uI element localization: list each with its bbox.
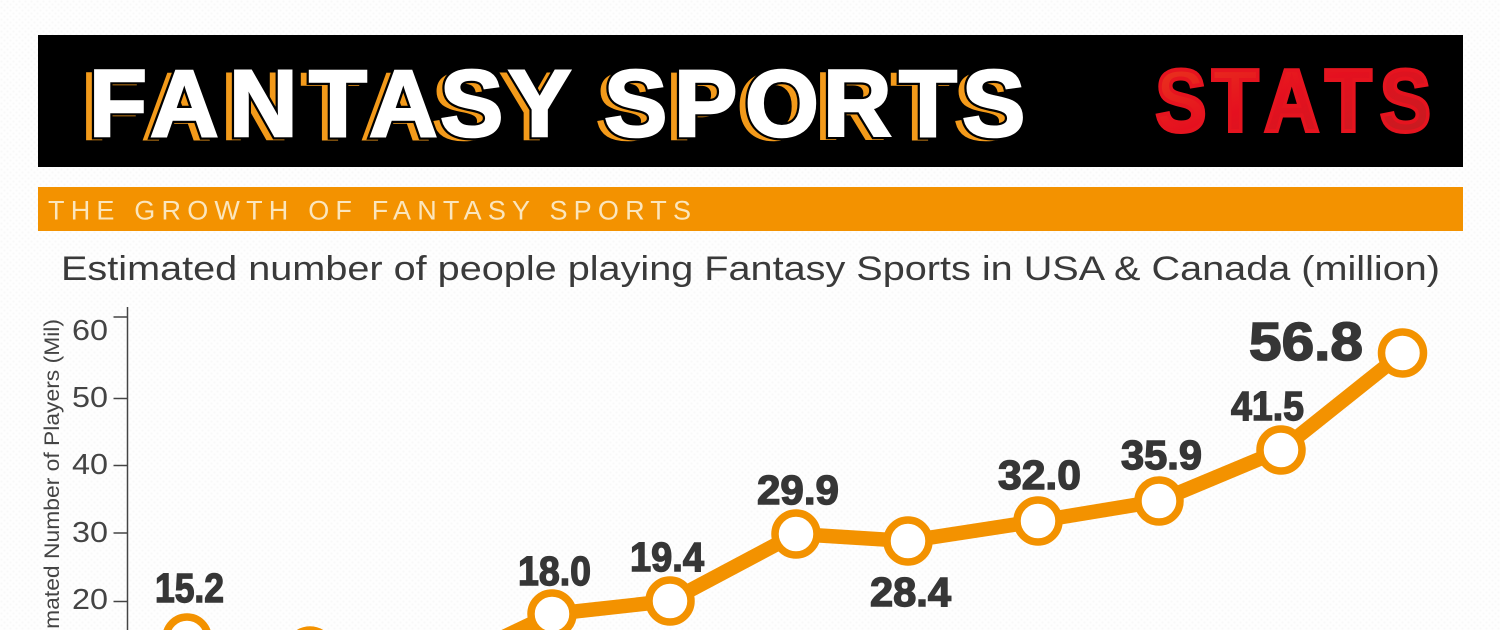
y axis (114, 307, 128, 630)
y axis tick labels: 40 (72, 449, 108, 481)
title: Fantasy Sports: FANTASY SPORTS (89, 51, 1025, 157)
data labels: 32.0 (998, 452, 1081, 498)
data labels: 18.0 (518, 548, 591, 594)
data labels: 35.9 (1121, 432, 1202, 478)
data line (187, 353, 1402, 630)
title banner (38, 35, 1463, 167)
title: Fantasy Sports: FANTASY SPORTS (81, 54, 1017, 160)
title: Fantasy Sports: FANTASY SPORTS (89, 51, 1025, 157)
data markers (166, 332, 1424, 630)
data labels: 56.8 (1249, 312, 1363, 372)
data labels: 41.5 (1231, 383, 1304, 429)
data labels (155, 312, 1363, 615)
y axis tick labels: 50 (72, 382, 108, 414)
y axis tick labels: 60 (72, 315, 108, 347)
data labels: 19.4 (630, 534, 704, 580)
data labels: 29.9 (757, 467, 839, 513)
data labels: 15.2 (155, 565, 224, 611)
title: Stats: STATS (1155, 52, 1431, 150)
y axis tick labels (72, 315, 108, 616)
chart subtitle: Estimated number of people playing Fantasy Sports in USA & Canada (million) (61, 250, 1440, 288)
y axis tick labels: 30 (72, 517, 108, 549)
section heading bar: THE GROWTH OF FANTASY SPORTS (48, 196, 691, 226)
section heading bar (38, 187, 1463, 231)
y axis tick labels: 20 (72, 584, 108, 616)
line chart (41, 307, 1428, 630)
data labels: 28.4 (870, 569, 951, 615)
